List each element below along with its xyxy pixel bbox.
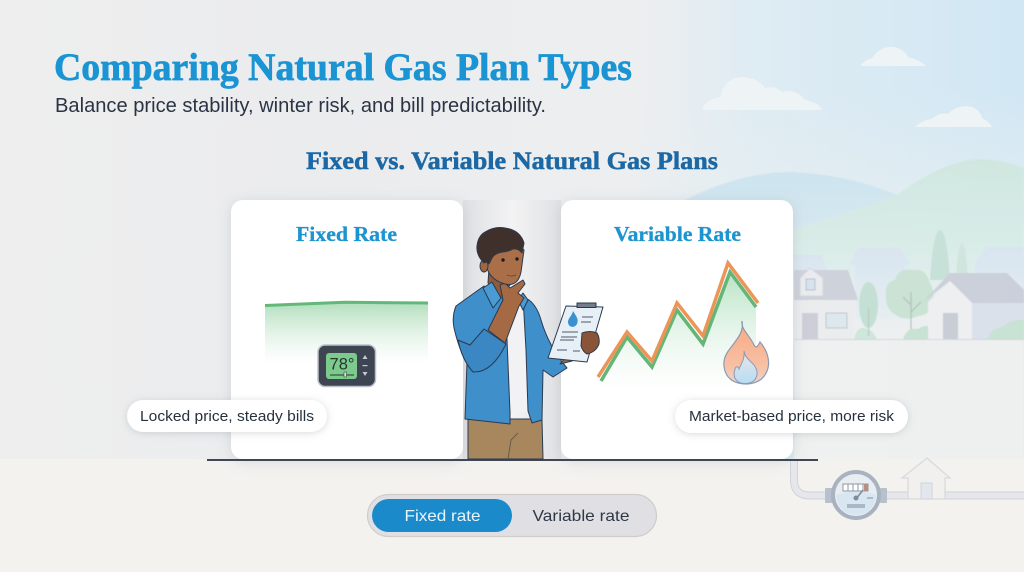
rolled sleeve xyxy=(458,329,506,372)
toggle: fixed or variable rate xyxy=(368,494,656,536)
icon: thermostat: 78° xyxy=(330,356,354,374)
active toggle: fixed rate: Fixed rate xyxy=(404,508,481,525)
hills and neighbourhood scene xyxy=(685,159,1024,460)
clipboard xyxy=(548,303,603,362)
chart: volatile price line xyxy=(598,263,758,392)
icon: flame xyxy=(724,321,769,384)
icon: thermostat xyxy=(318,345,376,386)
panel heading: variable rate: Variable Rate xyxy=(614,222,741,246)
person with clipboard xyxy=(453,228,603,459)
section heading: Fixed vs. Variable Natural Gas Plans xyxy=(306,148,718,175)
collar xyxy=(483,282,501,308)
shirt right panel and sleeve xyxy=(523,297,567,423)
t-shirt xyxy=(505,298,528,412)
hand holding clipboard xyxy=(581,332,599,354)
trousers xyxy=(468,419,543,459)
ground line xyxy=(207,459,818,461)
title: Comparing Natural Gas Plan Types xyxy=(54,46,632,89)
inactive toggle: variable rate: Variable rate xyxy=(532,508,630,525)
panel heading: fixed rate: Fixed Rate xyxy=(296,222,397,246)
ear xyxy=(480,260,488,272)
eyes and mouth xyxy=(501,258,505,262)
callout: fixed rate xyxy=(127,400,327,432)
clouds xyxy=(702,47,992,127)
subtitle: Balance price stability, winter risk, and bill predictability. xyxy=(55,95,546,117)
shirt left panel xyxy=(453,286,510,424)
callout: variable rate xyxy=(675,400,908,433)
column behind person xyxy=(463,200,561,459)
active toggle: fixed rate xyxy=(372,499,512,532)
hair xyxy=(477,228,524,264)
forearm and hand on chin xyxy=(488,280,525,343)
neck xyxy=(488,268,510,298)
wrist xyxy=(560,352,580,364)
panel: fixed rate xyxy=(231,200,463,459)
icon: gas meter and pipeline xyxy=(794,458,1024,518)
callout: variable rate: Market-based price, more risk xyxy=(689,408,895,425)
panel: variable rate xyxy=(561,200,793,459)
callout: fixed rate: Locked price, steady bills xyxy=(140,408,314,425)
chart: flat fixed price line xyxy=(265,302,428,364)
face xyxy=(485,240,524,284)
